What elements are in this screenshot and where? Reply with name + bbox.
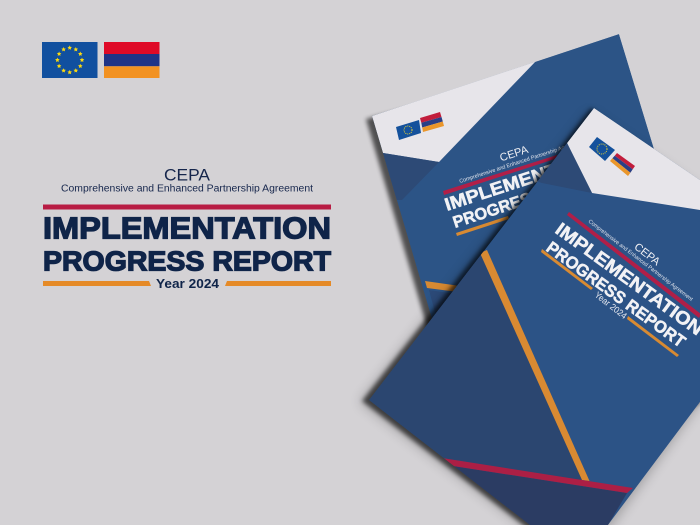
front year label: Year 2024 [593,290,629,321]
white flap [372,60,537,162]
front implementation: IMPLEMENTATION [552,218,700,339]
back cover text [425,146,564,308]
icon: EU flag [42,42,98,78]
shadow: front booklet tight [362,108,700,525]
back lower dark area [429,290,446,308]
icon: Armenian flag [104,42,160,78]
front flags [589,137,635,176]
dark triangle at flap [536,143,592,193]
back progress report: PROGRESS REPORT [451,164,613,232]
back subtitle: Comprehensive and Enhanced Partnership Agreement [459,139,585,185]
front red rule [567,212,700,318]
front orange rule left [541,249,593,290]
heading: CEPA: CEPA [164,166,210,184]
heading: implementation: IMPLEMENTATION [43,212,331,246]
dark navy panel [369,253,583,481]
dark triangle [383,153,439,200]
booklet: back cover [372,34,654,318]
title block [43,166,331,291]
lower navy panel [453,466,627,525]
back flags [396,112,444,140]
white flap [567,108,700,210]
back red rule [443,155,558,195]
back CEPA: CEPA [498,144,530,164]
front cover text [541,212,700,357]
year label: Year 2024 [156,277,219,291]
orange rule right [225,281,331,286]
red diagonal band [442,458,633,493]
booklet: front cover [369,108,700,525]
back implementation: IMPLEMENTATION [442,141,617,215]
orange diagonal band [480,250,590,481]
orange rule left [43,281,151,286]
front orange rule right [627,316,679,357]
front CEPA: CEPA [632,241,663,269]
heading: progress report: PROGRESS REPORT [43,246,331,276]
shadow: front booklet soft [360,112,700,525]
back lower orange band [425,281,457,292]
front progress report: PROGRESS REPORT [543,238,689,352]
subtitle: Comprehensive and Enhanced Partnership Agreement [61,184,313,194]
back orange rule [456,216,509,236]
front subtitle: Comprehensive and Enhanced Partnership Agreement [587,219,694,303]
shadow: back booklet [366,60,640,330]
red rule [43,204,331,210]
